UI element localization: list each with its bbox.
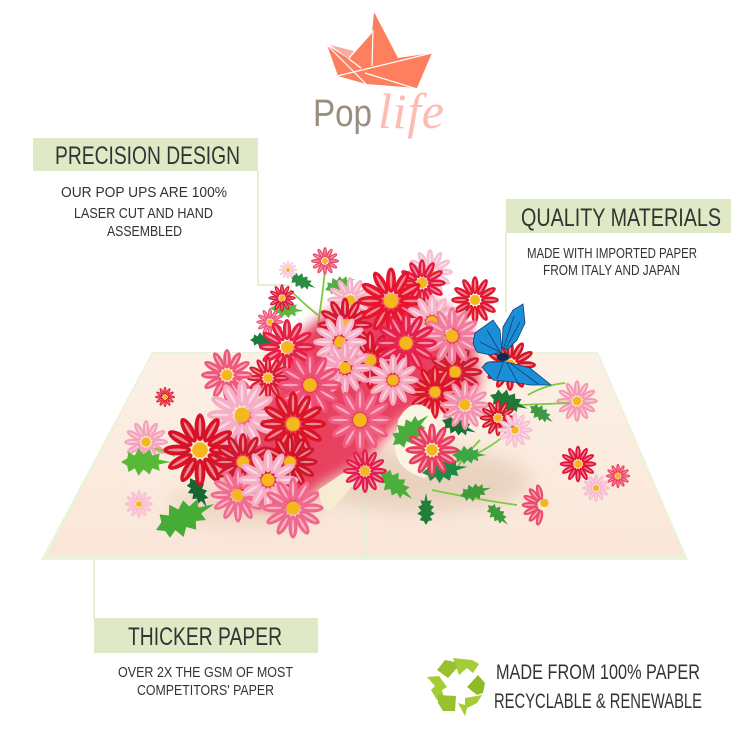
callout: precision design: ASSEMBLED xyxy=(107,224,182,240)
icon: recycling arrows xyxy=(427,658,485,716)
callout: thicker paper: COMPETITORS' PAPER xyxy=(137,683,274,699)
callout: quality materials: FROM ITALY AND JAPAN xyxy=(543,263,680,279)
callout: precision design: OUR POP UPS ARE 100% xyxy=(61,185,227,201)
flower bouquet: back layer xyxy=(256,247,536,430)
callout: quality materials: MADE WITH IMPORTED PAPER xyxy=(527,246,697,262)
text: recyclable claim xyxy=(494,661,702,713)
logo: Poplife paper boat: Pop xyxy=(313,93,372,135)
white pop-up paper and right-hand flowers xyxy=(318,400,533,512)
callout: thicker paper: OVER 2X THE GSM OF MOST xyxy=(118,665,293,681)
callout: precision design: PRECISION DESIGN xyxy=(55,142,240,170)
flower bouquet: front layer xyxy=(163,349,419,538)
logo: Poplife paper boat: life xyxy=(378,83,444,139)
icon: blue butterfly xyxy=(473,304,551,385)
flat printed flowers on card xyxy=(124,380,630,518)
callout connector: quality materials xyxy=(505,233,507,312)
callout: thicker paper: THICKER PAPER xyxy=(128,623,282,651)
leaves xyxy=(121,269,557,546)
green stems xyxy=(155,270,570,505)
bouquet base: dense petals behind flowers xyxy=(215,295,480,510)
flower: side-on pink bloom xyxy=(522,484,549,526)
callout: precision design xyxy=(33,138,258,240)
callout: quality materials xyxy=(506,199,731,279)
callout connector: precision design xyxy=(258,171,290,285)
logo: Poplife paper boat xyxy=(313,12,444,139)
callout: precision design: LASER CUT AND HAND xyxy=(74,206,213,222)
card: open pop-up card base xyxy=(41,352,688,560)
callout: thicker paper xyxy=(94,618,318,699)
callout connector: thicker paper xyxy=(93,556,95,618)
